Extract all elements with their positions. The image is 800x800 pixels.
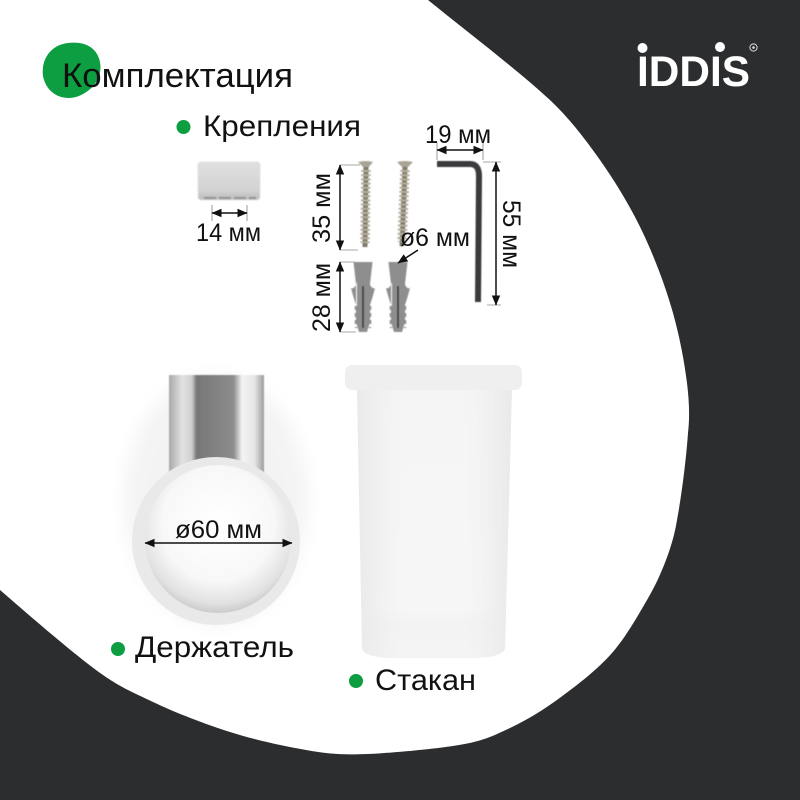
section: glass: [345, 365, 522, 697]
logo: IDDIS: IDDIS: [637, 48, 750, 96]
label: Держатель: Держатель: [135, 631, 294, 664]
dimension: 28 мм: 28 мм: [308, 263, 336, 332]
dimension: 35 мм: [308, 165, 360, 250]
photo: frosted glass tumbler: [345, 365, 522, 658]
title text: Комплектация: [62, 57, 293, 95]
dimension: 55 мм: [483, 162, 525, 305]
dimension: 19 мм: 19 мм: [425, 121, 491, 149]
photo: holder with frosted ring: [124, 375, 308, 625]
dimension: 28 мм: [308, 262, 356, 332]
title block: [43, 43, 293, 98]
green blob accent: [43, 43, 100, 98]
photo: screw left: [358, 161, 373, 247]
dimension: 55 мм: 55 мм: [497, 200, 525, 268]
dimension: 35 мм: 35 мм: [308, 173, 336, 243]
photo: screw right: [397, 161, 413, 246]
label: Крепления: Крепления: [203, 110, 361, 143]
section: holder: [111, 375, 308, 664]
dimension: 14 мм: [196, 205, 261, 247]
photo: hex key: [437, 164, 479, 302]
dimension: 19 мм: [425, 121, 491, 160]
photo: wall anchor left: [351, 262, 375, 332]
dimension: diameter 6 мм: ø6 мм: [400, 224, 470, 252]
dimension: diameter 6 мм: [398, 224, 470, 263]
dimension: 14 мм: 14 мм: [196, 219, 261, 247]
label: Стакан: Стакан: [375, 664, 476, 697]
photo: wall anchor right: [386, 262, 410, 332]
dimension: diameter 60 мм: ø60 мм: [175, 516, 262, 544]
section: fasteners: [176, 110, 525, 332]
photo: metal clip: [198, 162, 260, 200]
